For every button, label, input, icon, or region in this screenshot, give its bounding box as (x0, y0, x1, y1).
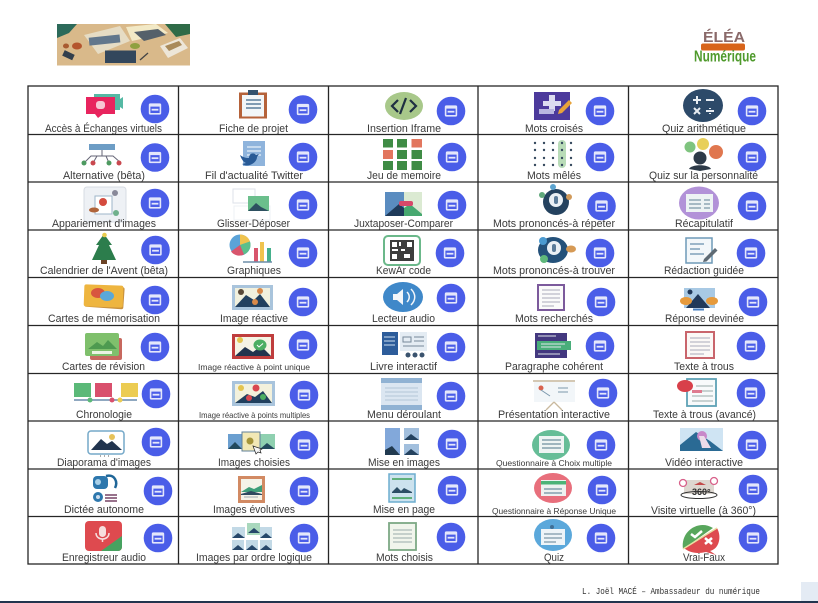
icon: word choice (389, 523, 416, 550)
button (586, 97, 614, 125)
label: Réponse devinée (665, 313, 744, 325)
button (141, 189, 169, 217)
button (586, 332, 614, 360)
icon: image sequence (385, 428, 419, 455)
label: Insertion Iframe (367, 123, 441, 135)
cell: Mots prononcés-à trouver (493, 237, 615, 277)
cell: Rédaction guidée (664, 238, 765, 277)
cell: Livre interactif (370, 332, 465, 373)
logo: ÉLÉA Numérique (694, 29, 756, 66)
icon: branching tree (82, 144, 122, 166)
button (141, 236, 170, 264)
button (586, 143, 614, 171)
cell: Réponse devinée (665, 288, 767, 325)
label: Quiz arithmétique (662, 123, 746, 135)
button (437, 523, 465, 551)
cell: Image réactive (220, 285, 317, 325)
label: Mots prononcés-à trouver (493, 265, 615, 277)
cell: Quiz (534, 519, 615, 564)
label: Livre interactif (370, 361, 438, 373)
label: Questionnaire à Réponse Unique (492, 507, 616, 516)
icon: fill in the blanks (686, 332, 714, 358)
label: Glisser-Déposer (217, 218, 290, 230)
label: Menu déroulant (367, 409, 442, 421)
cell: Menu déroulant (367, 378, 465, 421)
cell: Mots mêlés (527, 140, 614, 182)
cell: Mots prononcés-à répeter (493, 184, 616, 230)
button (438, 476, 466, 504)
icon: timeline (74, 383, 138, 402)
icon: matching images (84, 187, 126, 222)
button (141, 143, 169, 172)
icon: find words (538, 285, 564, 310)
icon: quiz (534, 519, 572, 551)
label: Appariement d'images (52, 218, 156, 230)
label: Mise en images (368, 457, 440, 469)
corner shade (801, 582, 818, 601)
label: Récapitulatif (675, 218, 734, 230)
icon: charts (230, 234, 272, 262)
icon: true or false (683, 525, 719, 555)
icon: microphone speech (539, 184, 572, 215)
icon: drag and drop (233, 189, 270, 220)
button (438, 143, 466, 171)
label: Accès à Échanges virtuels (45, 122, 162, 135)
cell: Accès à Échanges virtuels (45, 94, 169, 135)
label: Présentation interactive (498, 409, 610, 421)
label: Quiz sur la personnalité (649, 170, 758, 182)
logo: ÉLÉA Numérique: ÉLÉA (703, 29, 745, 46)
icon: image ordering (232, 523, 272, 550)
icon: QR code (384, 236, 420, 265)
icon: microphone quiz (538, 237, 576, 263)
button (144, 477, 172, 505)
cell: Cartes de mémorisation (48, 284, 169, 325)
cell: Texte à trous (avancé) (653, 379, 765, 421)
label: Image réactive à point unique (198, 363, 310, 372)
label: Mots croisés (525, 123, 583, 135)
label: Mots mêlés (527, 170, 581, 182)
button (290, 381, 318, 409)
icon: summary (679, 186, 719, 220)
button (738, 143, 766, 171)
button (737, 239, 765, 267)
icon: interactive book (382, 332, 427, 358)
label: Lecteur audio (372, 313, 435, 325)
cell: Récapitulatif (675, 186, 766, 230)
cell: Mots choisis (376, 523, 465, 564)
cell: Juxtaposer-Comparer (354, 191, 466, 230)
label: Jeu de memoire (367, 170, 441, 182)
button (589, 379, 617, 407)
cell: Appariement d'images (52, 187, 169, 230)
icon: christmas tree (92, 233, 116, 264)
table grid (28, 86, 778, 564)
button (142, 380, 170, 408)
button (437, 284, 465, 312)
cell: Cartes de révision (62, 333, 169, 373)
icon: image hotspots (232, 285, 273, 310)
button (587, 288, 615, 316)
cell: Paragraphe cohérent (505, 332, 614, 373)
icon: multiple hotspots (232, 381, 275, 406)
cell: Alternative (bêta) (63, 143, 169, 182)
label: Cartes de révision (62, 361, 145, 373)
button (739, 475, 767, 503)
icon: multiple choice (532, 430, 570, 460)
button (438, 430, 466, 458)
button (290, 477, 318, 505)
icon: presentation (533, 380, 575, 410)
cell: Quiz arithmétique (662, 89, 766, 135)
icon: single choice (534, 473, 572, 503)
button (587, 524, 615, 552)
icon: crossword (534, 92, 572, 120)
label: Mise en page (373, 504, 435, 516)
icon: chat video (86, 94, 123, 118)
label: Fiche de projet (219, 123, 289, 135)
button (289, 95, 317, 124)
button (289, 288, 317, 316)
cell: Mots croisés (525, 92, 614, 135)
button (437, 333, 465, 361)
icon: dictation (93, 476, 117, 502)
label: Vrai-Faux (683, 552, 725, 564)
icon: word search (534, 140, 572, 168)
icon: guess the answer (680, 288, 718, 310)
icon: before-after image (385, 192, 422, 216)
header image: desk scene (57, 24, 190, 66)
cell: Images choisies (218, 431, 318, 469)
label: Dictée autonome (64, 504, 144, 516)
label: Vidéo interactive (665, 457, 743, 469)
label: Image réactive à points multiples (199, 411, 310, 420)
cell: Enregistreur audio (62, 521, 172, 564)
icon: twitter document (240, 141, 265, 166)
label: Quiz (544, 552, 564, 564)
icon: image slider (238, 476, 265, 503)
label: Mots recherchés (515, 313, 593, 325)
button (586, 239, 614, 267)
button (289, 191, 317, 219)
icon: code (385, 92, 423, 120)
label: Visite virtuelle (à 360°) (651, 505, 756, 517)
cell: Vidéo interactive (665, 428, 766, 469)
button (290, 431, 318, 459)
cell: Visite virtuelle (à 360°) (651, 475, 767, 517)
cell: Lecteur audio (372, 282, 465, 325)
cell: Vrai-Faux (683, 524, 767, 564)
cell: Images par ordre logique (196, 523, 318, 564)
icon: math (683, 89, 723, 122)
icon: layout (389, 474, 415, 502)
button (738, 192, 766, 220)
label: Mots choisis (376, 552, 433, 564)
button (737, 379, 765, 407)
cell: Jeu de memoire (367, 139, 466, 182)
cell: Questionnaire à Choix multiple (496, 430, 615, 468)
icon: person with bubbles (684, 138, 723, 171)
icon: virtual tour 360: 360° (692, 487, 711, 497)
button (141, 286, 169, 314)
button (290, 524, 318, 552)
button (141, 333, 169, 361)
label: Chronologie (76, 409, 132, 421)
cell: Quiz sur la personnalité (649, 138, 766, 182)
cell: Insertion Iframe (367, 92, 465, 135)
icon: image choice (228, 432, 275, 454)
label: KewAr code (376, 265, 431, 277)
button (437, 382, 465, 410)
button (739, 524, 767, 552)
cell: Fiche de projet (219, 90, 317, 135)
cell: KewAr code (376, 236, 464, 277)
label: Questionnaire à Choix multiple (496, 459, 612, 468)
cell: Image réactive à points multiples (199, 381, 318, 420)
cell: Images évolutives (213, 476, 318, 516)
label: Rédaction guidée (664, 265, 744, 277)
label: Texte à trous (avancé) (653, 409, 756, 421)
button (142, 428, 170, 456)
label: Enregistreur audio (62, 552, 146, 564)
button (437, 97, 465, 125)
label: Mots prononcés-à répeter (493, 218, 615, 230)
cell: Graphiques (227, 234, 317, 277)
cell: Calendrier de l'Avent (bêta) (40, 233, 170, 277)
icon: single hotspot (232, 334, 274, 359)
label: Juxtaposer-Comparer (354, 218, 453, 230)
icon: paragraph (535, 333, 571, 358)
icon: flash cards (84, 284, 125, 309)
button (289, 331, 317, 359)
bottom band (0, 601, 818, 603)
icon: advanced blanks (677, 379, 716, 406)
cell: Questionnaire à Réponse Unique (492, 473, 616, 516)
icon: interactive video (680, 428, 723, 451)
cell: Dictée autonome (64, 476, 172, 516)
cell: Mots recherchés (515, 285, 615, 325)
cell: Image réactive à point unique (198, 331, 317, 372)
footer credit: L. Joël MACÉ – Ambassadeur du numérique (582, 586, 760, 597)
cell: Mise en page (373, 474, 466, 516)
label: Images choisies (218, 457, 290, 469)
label: Cartes de mémorisation (48, 313, 160, 325)
cell: Texte à trous (674, 332, 765, 373)
cell: Chronologie (74, 380, 170, 421)
icon: clipboard (239, 90, 267, 118)
button (738, 97, 766, 125)
label: Calendrier de l'Avent (bêta) (40, 265, 168, 277)
label: Images évolutives (213, 504, 295, 516)
cell: Présentation interactive (498, 379, 617, 421)
cell: Glisser-Déposer (217, 189, 317, 230)
label: Diaporama d'images (57, 457, 151, 469)
button (587, 192, 616, 220)
button (737, 332, 765, 360)
icon: guided writing (686, 238, 718, 263)
button (587, 431, 615, 459)
cell: Fil d'actualité Twitter (205, 141, 317, 182)
label: Fil d'actualité Twitter (205, 170, 303, 182)
label: Graphiques (227, 265, 281, 277)
button (141, 95, 169, 123)
button (436, 239, 464, 267)
label: Alternative (bêta) (63, 170, 145, 182)
button (739, 288, 767, 316)
icon: audio recorder (85, 521, 122, 551)
logo: ÉLÉA Numérique: Numérique (694, 48, 756, 66)
button (289, 239, 317, 267)
button (144, 524, 172, 552)
icon: slideshow (88, 431, 124, 456)
icon: memory grid (383, 139, 422, 170)
button (438, 191, 466, 219)
icon: accordion (381, 378, 422, 410)
button (289, 143, 317, 171)
cell: Mise en images (368, 428, 466, 469)
icon: speaker (383, 282, 423, 312)
label: Image réactive (220, 313, 288, 325)
label: Images par ordre logique (196, 552, 312, 564)
label: Texte à trous (674, 361, 734, 373)
cell: Diaporama d'images (57, 428, 170, 469)
button (738, 431, 766, 459)
icon: dialog cards (85, 333, 122, 360)
label: Paragraphe cohérent (505, 361, 604, 373)
button (588, 476, 616, 504)
